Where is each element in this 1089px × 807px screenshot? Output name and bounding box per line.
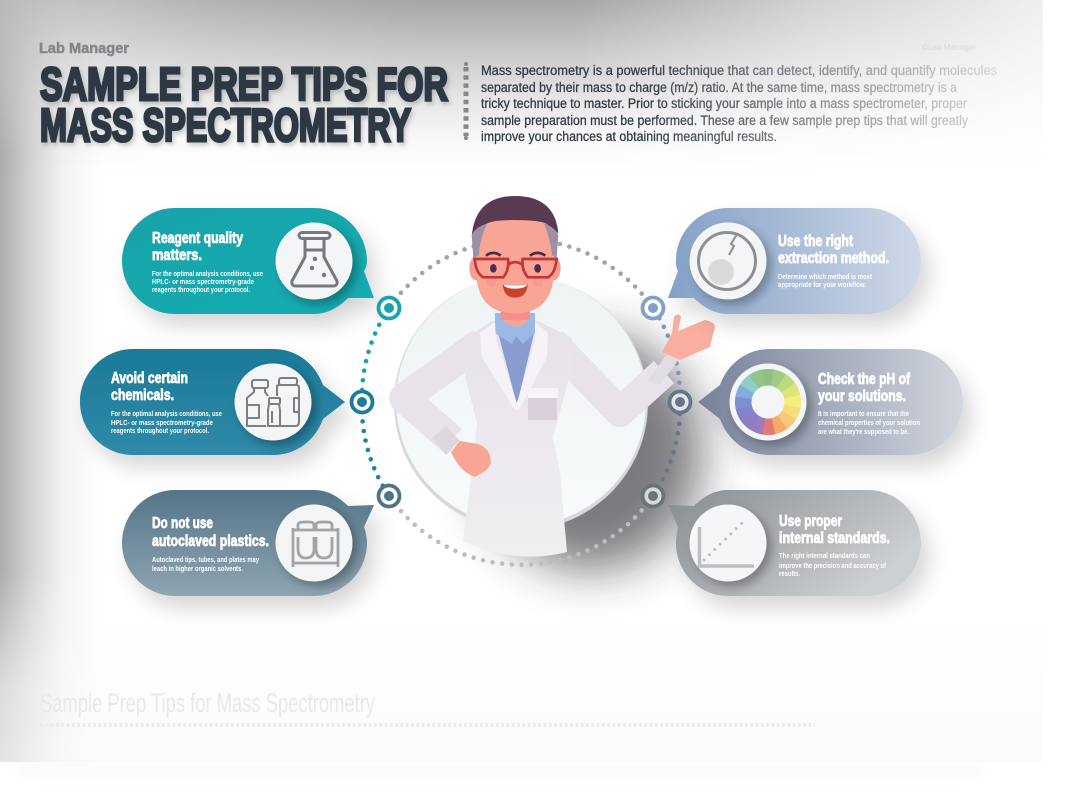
neck	[501, 308, 530, 326]
body text: Determine which method is most	[778, 272, 872, 281]
heading	[111, 370, 188, 404]
body text: appropriate for your workflow.	[778, 280, 866, 289]
heading: extraction method.	[778, 250, 889, 267]
body text	[152, 555, 260, 573]
heading: Reagent quality	[152, 230, 243, 247]
heading: Avoid certain	[111, 370, 188, 387]
icon: pH colour wheel	[730, 364, 806, 440]
heading: Use proper	[779, 513, 842, 530]
intro text	[481, 63, 997, 144]
body text: improve the precision and accuracy of	[779, 561, 886, 570]
icon: test tubes	[276, 504, 352, 582]
left cuff	[432, 426, 460, 455]
body text: reagents throughout your protocol.	[111, 426, 209, 435]
icon: extraction dial	[690, 222, 766, 300]
panel: internal standards	[668, 490, 921, 596]
body text	[152, 269, 263, 294]
title: SAMPLE PREP TIPS FOR	[40, 58, 448, 110]
head in zoomed coordinates	[469, 196, 561, 320]
shirt and collar	[496, 325, 536, 405]
body text: leach in higher organic solvents.	[152, 564, 243, 573]
body text: For the optimal analysis conditions, use	[111, 409, 222, 418]
heading	[152, 230, 243, 264]
intro text: Mass spectrometry is a powerful technique that can detect, identify, and quantify molecules	[481, 63, 997, 78]
central disc long shadow	[478, 334, 702, 570]
heading	[152, 515, 269, 550]
title: MASS SPECTROMETRY	[40, 99, 411, 151]
copyright mark: ©Lab Manager	[922, 43, 976, 52]
left hand	[451, 441, 491, 477]
scientist character	[404, 196, 715, 557]
ring node markers	[352, 298, 690, 506]
heading: matters.	[152, 247, 202, 264]
heading: Use the right	[778, 233, 854, 250]
icon: bottles	[234, 364, 312, 440]
intro text: improve your chances at obtaining meaningful results.	[481, 129, 777, 144]
body text: are what they're supposed to be.	[818, 427, 909, 436]
coat arms	[404, 342, 664, 440]
body text: chemical properties of your solution	[818, 418, 920, 427]
central disc	[394, 276, 648, 530]
body text: Autoclaved tips, tubes, and plates may	[152, 555, 260, 564]
body text: For the optimal analysis conditions, use	[152, 269, 263, 278]
body text: results.	[779, 569, 800, 578]
icon: flask	[276, 222, 352, 300]
lapels	[480, 322, 519, 410]
heading	[818, 371, 911, 405]
body text	[111, 409, 222, 435]
body text: The right internal standards can	[779, 551, 870, 560]
logo: Lab Manager: Lab Manager	[39, 41, 129, 57]
coat torso	[462, 321, 572, 557]
body text	[779, 551, 886, 578]
right hand	[662, 314, 715, 360]
heading: chemicals.	[111, 387, 174, 404]
panel: pH of solutions	[698, 349, 963, 455]
body text: reagents throughout your protocol.	[152, 285, 250, 294]
title	[40, 58, 448, 151]
panel: extraction method	[668, 208, 921, 314]
heading: internal standards.	[779, 530, 890, 547]
dotted ring	[362, 239, 680, 565]
panel: reagent quality	[122, 208, 374, 314]
heading: your solutions.	[818, 388, 906, 405]
intro text: separated by their mass to charge (m/z) ratio. At the same time, mass spectrometry is a	[481, 80, 957, 95]
intro text: tricky technique to master. Prior to sticking your sample into a mass spectrometer, proper	[481, 96, 967, 111]
body text: It is important to ensure that the	[818, 409, 909, 418]
pocket	[528, 388, 558, 420]
heading: autoclaved plastics.	[152, 533, 269, 550]
panel: avoid certain chemicals	[80, 349, 345, 455]
right cuff	[647, 353, 677, 385]
heading: Do not use	[152, 515, 213, 532]
body text: HPLC- or mass spectrometry-grade	[111, 418, 213, 427]
panel: autoclaved plastics	[122, 490, 374, 596]
heading	[778, 233, 889, 267]
body text	[778, 272, 872, 289]
footer dotted rule	[40, 723, 815, 727]
heading	[779, 513, 890, 547]
heading: Check the pH of	[818, 371, 911, 388]
dotted divider	[464, 62, 468, 140]
intro text: sample preparation must be performed. These are a few sample prep tips that will greatly	[481, 113, 968, 128]
body text	[818, 409, 920, 436]
body text: HPLC- or mass spectrometry-grade	[152, 277, 254, 286]
footer title: Sample Prep Tips for Mass Spectrometry	[40, 688, 375, 718]
icon: calibration chart	[690, 504, 766, 582]
